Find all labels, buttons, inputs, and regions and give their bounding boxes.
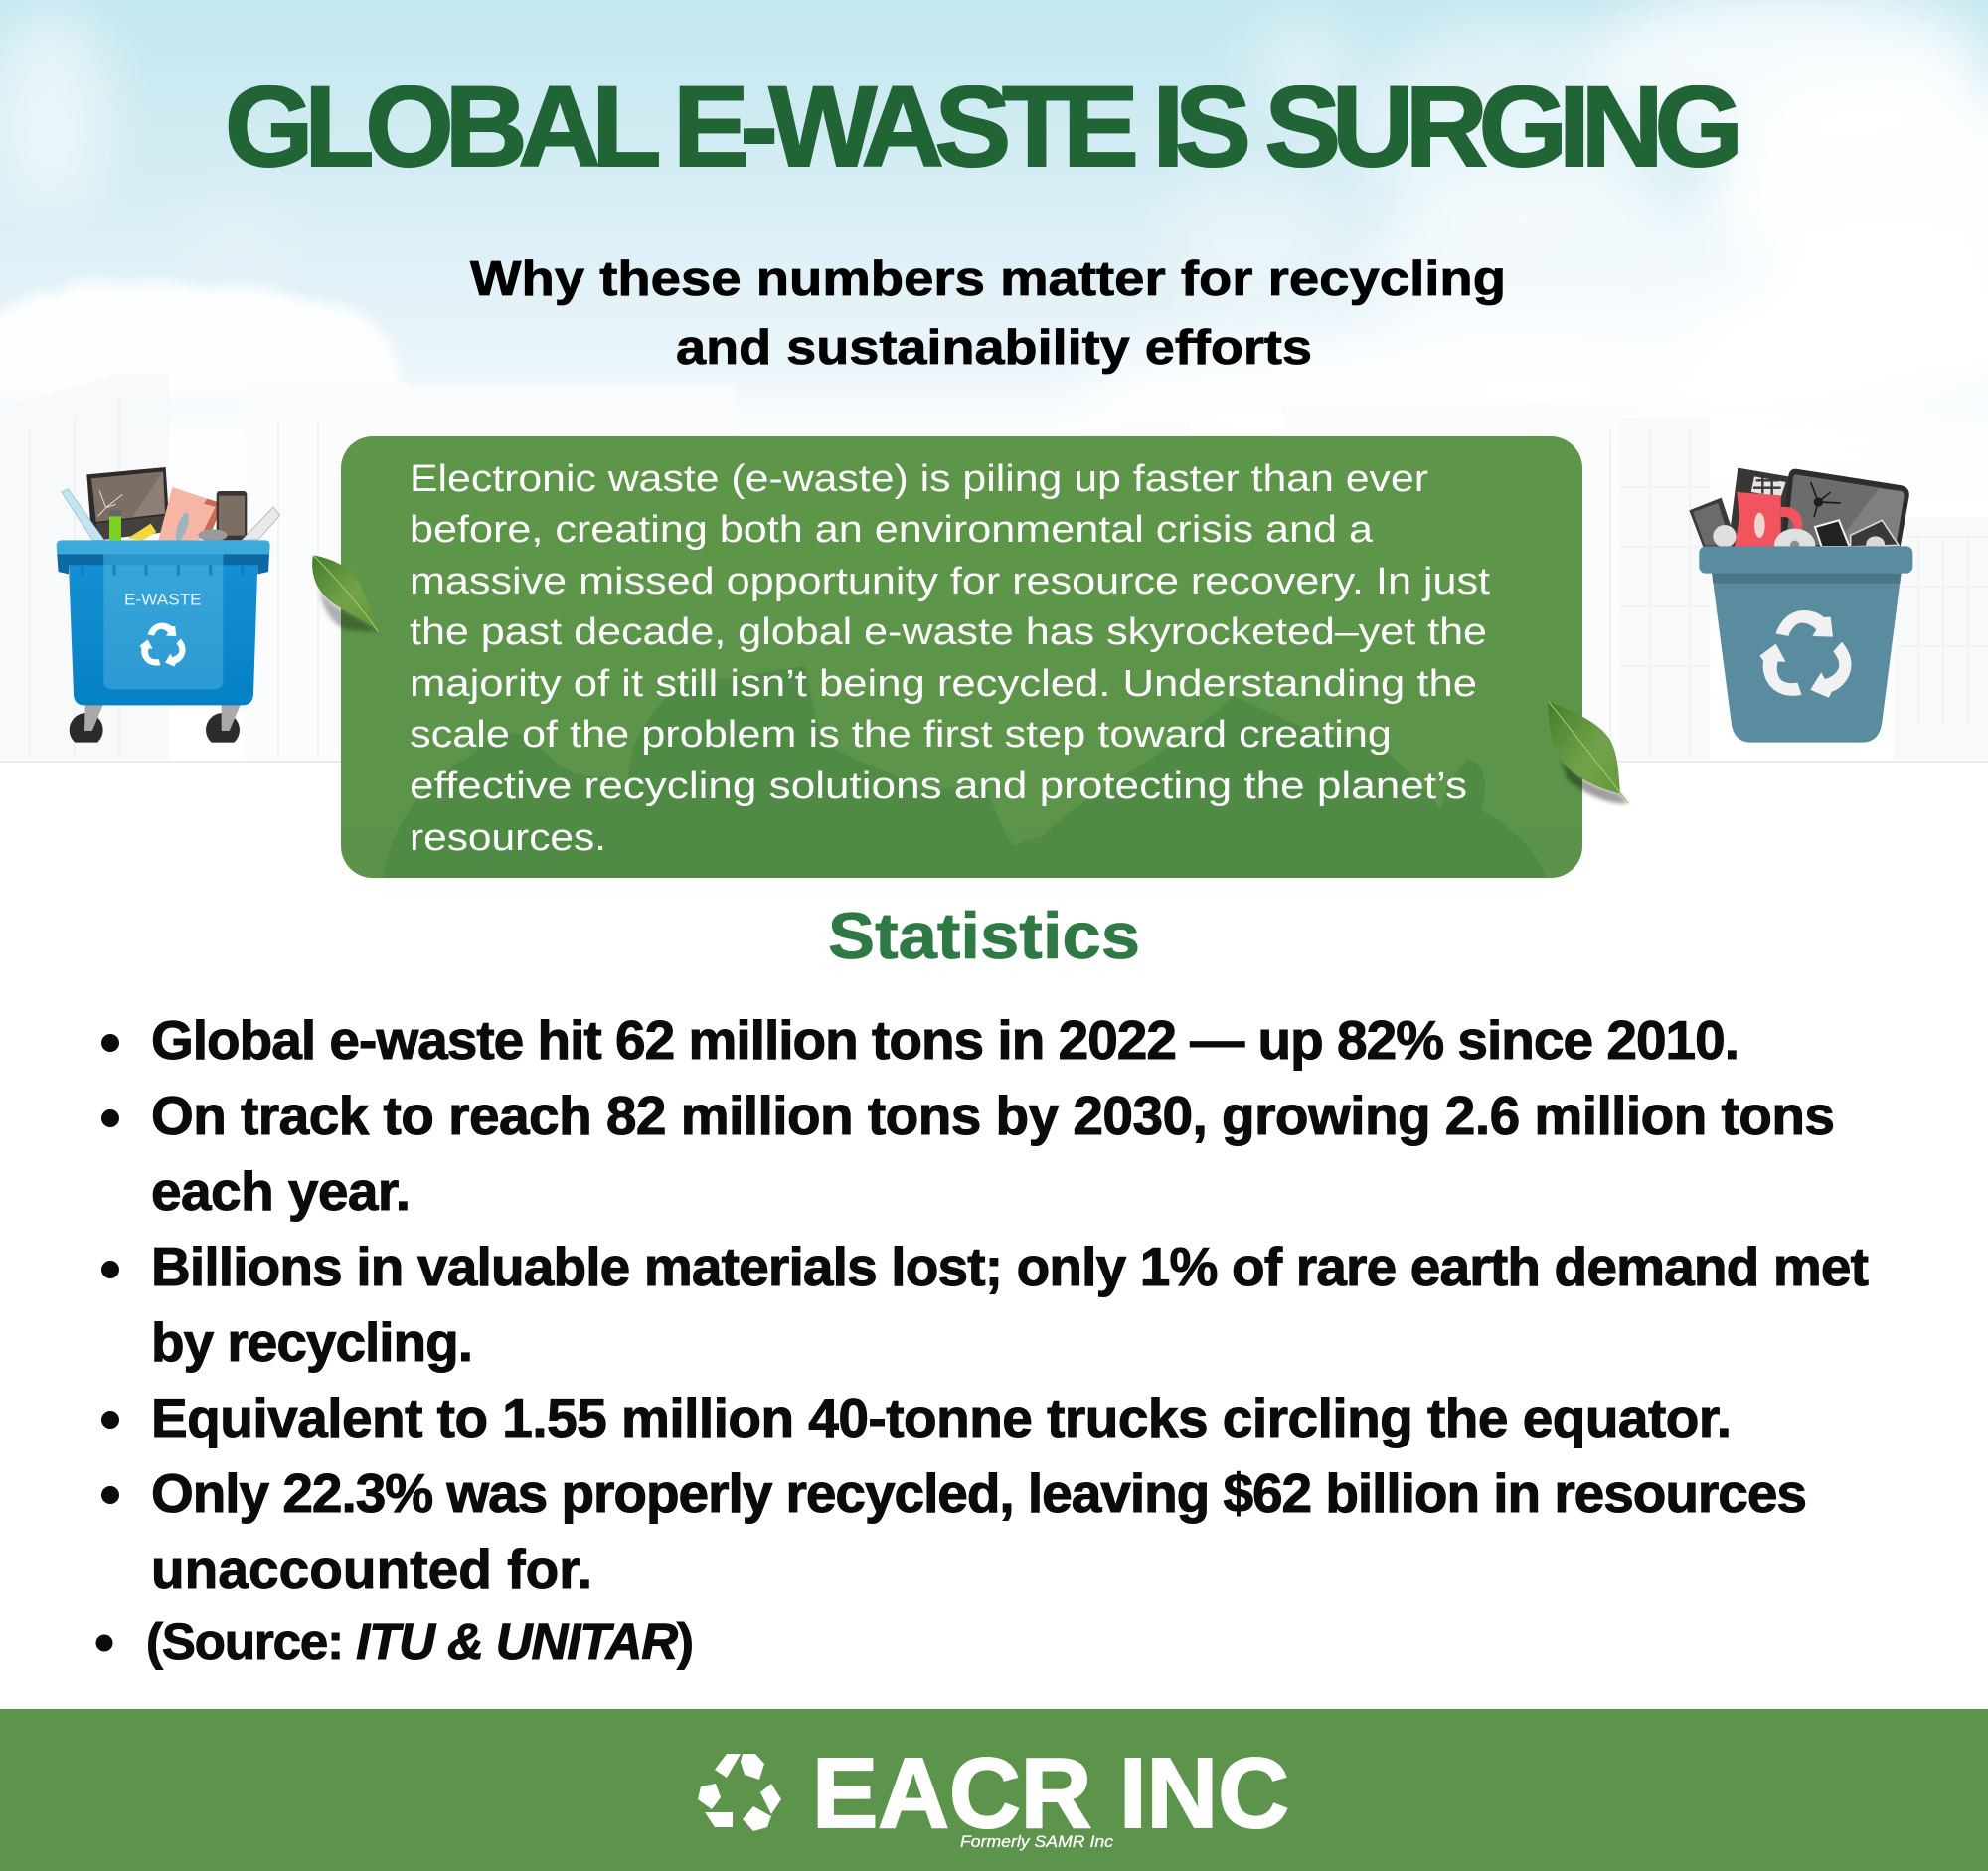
bin rim — [1699, 546, 1912, 574]
statistics bullet list — [96, 1009, 1869, 1670]
heading: Statistics: Statistics — [828, 899, 1140, 972]
footer band — [0, 1709, 1988, 1871]
bullet 3: Billions in valuable materials lost; only 1% of rare earth demand met — [151, 1236, 1869, 1297]
background: sky, clouds and buildings — [0, 0, 1988, 763]
intro paragraph: massive missed opportunity for resource recovery. In just — [410, 561, 1491, 602]
title: GLOBAL E-WASTE IS SURGING — [225, 64, 1743, 191]
panel: intro text box — [341, 436, 1582, 878]
bullet 2: On track to reach 82 million tons by 2030, growing 2.6 million tons — [151, 1085, 1835, 1146]
decorative darker world silhouette — [383, 666, 1546, 878]
bin contents — [62, 467, 280, 543]
bullet 5 — [101, 1462, 1807, 1600]
bullet 5: Only 22.3% was properly recycled, leaving $62 billion in resources — [151, 1462, 1807, 1524]
bullet 2: each year. — [151, 1160, 411, 1222]
bullet 3 — [101, 1236, 1869, 1373]
bin body — [1711, 567, 1902, 743]
intro paragraph: majority of it still isn’t being recycled. Understanding the — [410, 663, 1477, 705]
bin label: E-WASTE — [124, 590, 202, 608]
icon: recycle symbol on teal bin — [1753, 610, 1862, 707]
icon: recycle symbol on blue bin — [136, 623, 191, 671]
icon: blue e-waste bin — [57, 467, 280, 747]
subtitle: and sustainability efforts — [676, 321, 1312, 375]
wheels — [70, 705, 241, 743]
subtitle: Why these numbers matter for recycling — [470, 253, 1506, 306]
icon: teal recycling bin — [1689, 468, 1912, 743]
intro paragraph: scale of the problem is the first step toward creating — [410, 714, 1392, 756]
bullet 4: Equivalent to 1.55 million 40-tonne trucks circling the equator. — [151, 1387, 1732, 1448]
bin contents — [1689, 468, 1909, 562]
logo: recycle mark — [698, 1754, 781, 1831]
bullet 1: Global e-waste hit 62 million tons in 2022 — up 82% since 2010. — [151, 1009, 1740, 1071]
bin lid — [57, 540, 270, 574]
logo tagline: Formerly SAMR Inc — [960, 1832, 1114, 1851]
intro paragraph: the past decade, global e-waste has skyrocketed–yet the — [410, 611, 1487, 653]
source line: (Source: ITU & UNITAR) — [146, 1614, 694, 1670]
icon: leaf left — [312, 555, 379, 632]
intro paragraph — [410, 458, 1491, 859]
bin body — [69, 564, 257, 705]
bullet 5: unaccounted for. — [151, 1538, 592, 1600]
intro paragraph: resources. — [410, 817, 606, 859]
intro paragraph: before, creating both an environmental crisis and a — [410, 509, 1374, 551]
subtitle — [470, 253, 1506, 375]
bullet 2 — [101, 1085, 1835, 1222]
intro paragraph: Electronic waste (e-waste) is piling up faster than ever — [410, 458, 1428, 500]
logo wordmark: EACR INC — [812, 1738, 1289, 1849]
bullet 3: by recycling. — [151, 1311, 473, 1373]
icon: leaf right — [1548, 701, 1628, 803]
intro paragraph: effective recycling solutions and protecting the planet’s — [410, 765, 1467, 807]
